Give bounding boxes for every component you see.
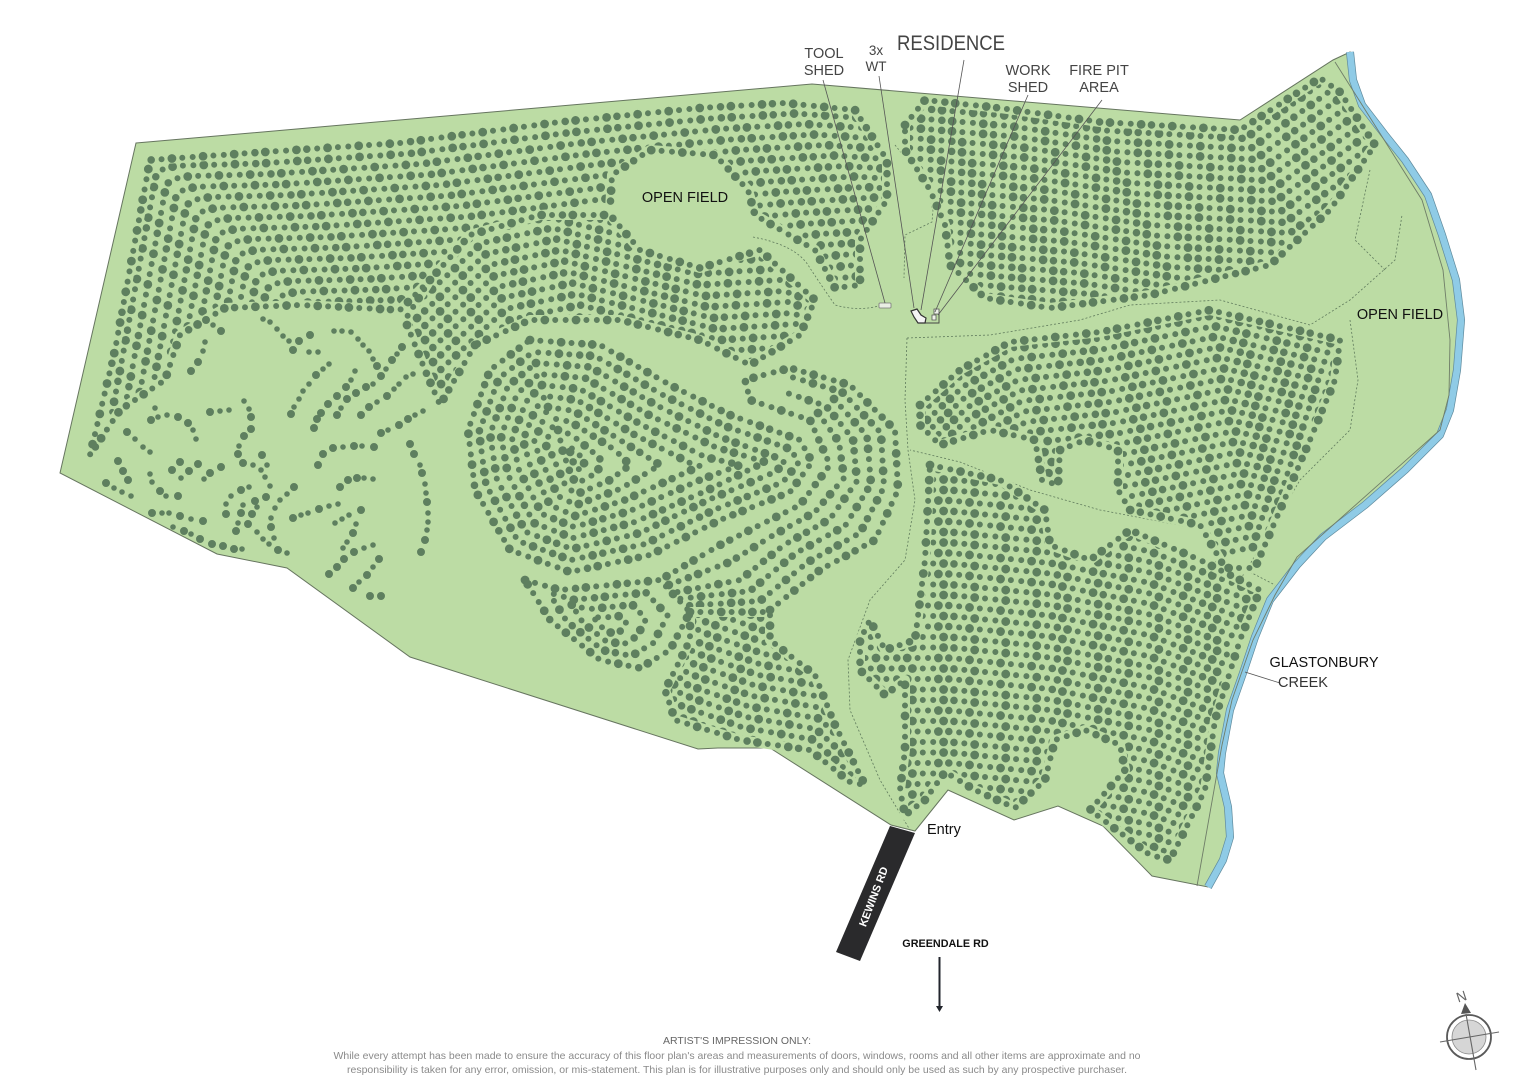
- trees: snake band around central oval: [666, 376, 884, 606]
- trees: south-east block: [865, 472, 1254, 854]
- tree plantation rows: [70, 45, 1465, 980]
- disclaimer: While every attempt has been made to ensure the accuracy of this floor plan's areas and measurements of doors, windows, rooms and all other items are approximate and no: [334, 1050, 1141, 1062]
- site land parcel: [60, 52, 1461, 887]
- label: tool shed: SHED: [804, 63, 844, 79]
- trees: north-east band: [910, 84, 1368, 303]
- label: glastonbury creek: GLASTONBURY: [1269, 655, 1379, 671]
- label: fire pit area: AREA: [1079, 80, 1119, 96]
- trees: east-central block: [925, 315, 1334, 558]
- inner boundary line along creek: [1197, 62, 1450, 886]
- label: 3x WT: 3x: [869, 43, 883, 58]
- label: open field east: OPEN FIELD: [1357, 307, 1443, 323]
- icon: north compass: [1440, 987, 1499, 1070]
- road: Kewins Rd: KEWINS RD: [857, 865, 891, 928]
- trees: north-west band: [109, 109, 882, 414]
- label: tool shed: TOOL: [804, 46, 844, 62]
- arrow: to Greendale Rd: [936, 957, 943, 1012]
- dotted access trails: [753, 145, 1402, 830]
- disclaimer: ARTIST'S IMPRESSION ONLY:: [663, 1035, 811, 1047]
- label: work shed: WORK: [1005, 63, 1051, 79]
- label: entry: Entry: [927, 822, 962, 838]
- leader lines: [823, 60, 1280, 683]
- trees: south-west curl: [525, 580, 690, 668]
- trees: southern lobe: [670, 617, 856, 778]
- label: residence: RESIDENCE: [897, 32, 1005, 55]
- road: Kewins Rd: [836, 826, 915, 961]
- label: work shed: SHED: [1008, 80, 1048, 96]
- label: glastonbury creek: CREEK: [1278, 675, 1328, 691]
- scattered trees in western open area: [106, 319, 428, 596]
- trees: band south of open field: [412, 220, 809, 388]
- icon: north compass: N: [1454, 987, 1469, 1005]
- icon: residence building: [911, 309, 939, 323]
- trees: central oval block: [468, 340, 812, 572]
- creek: [1208, 52, 1461, 887]
- label: open field west: OPEN FIELD: [642, 190, 728, 206]
- label: 3x WT: WT: [866, 59, 886, 74]
- disclaimer: [334, 1035, 1141, 1076]
- label: fire pit area: FIRE PIT: [1069, 63, 1129, 79]
- label: Greendale Rd: GREENDALE RD: [902, 938, 989, 950]
- disclaimer: responsibility is taken for any error, omission, or mis-statement. This plan is for illustrative purposes only and should only be used as such by any prospective purchaser.: [347, 1064, 1127, 1076]
- icon: tool shed: [879, 303, 891, 308]
